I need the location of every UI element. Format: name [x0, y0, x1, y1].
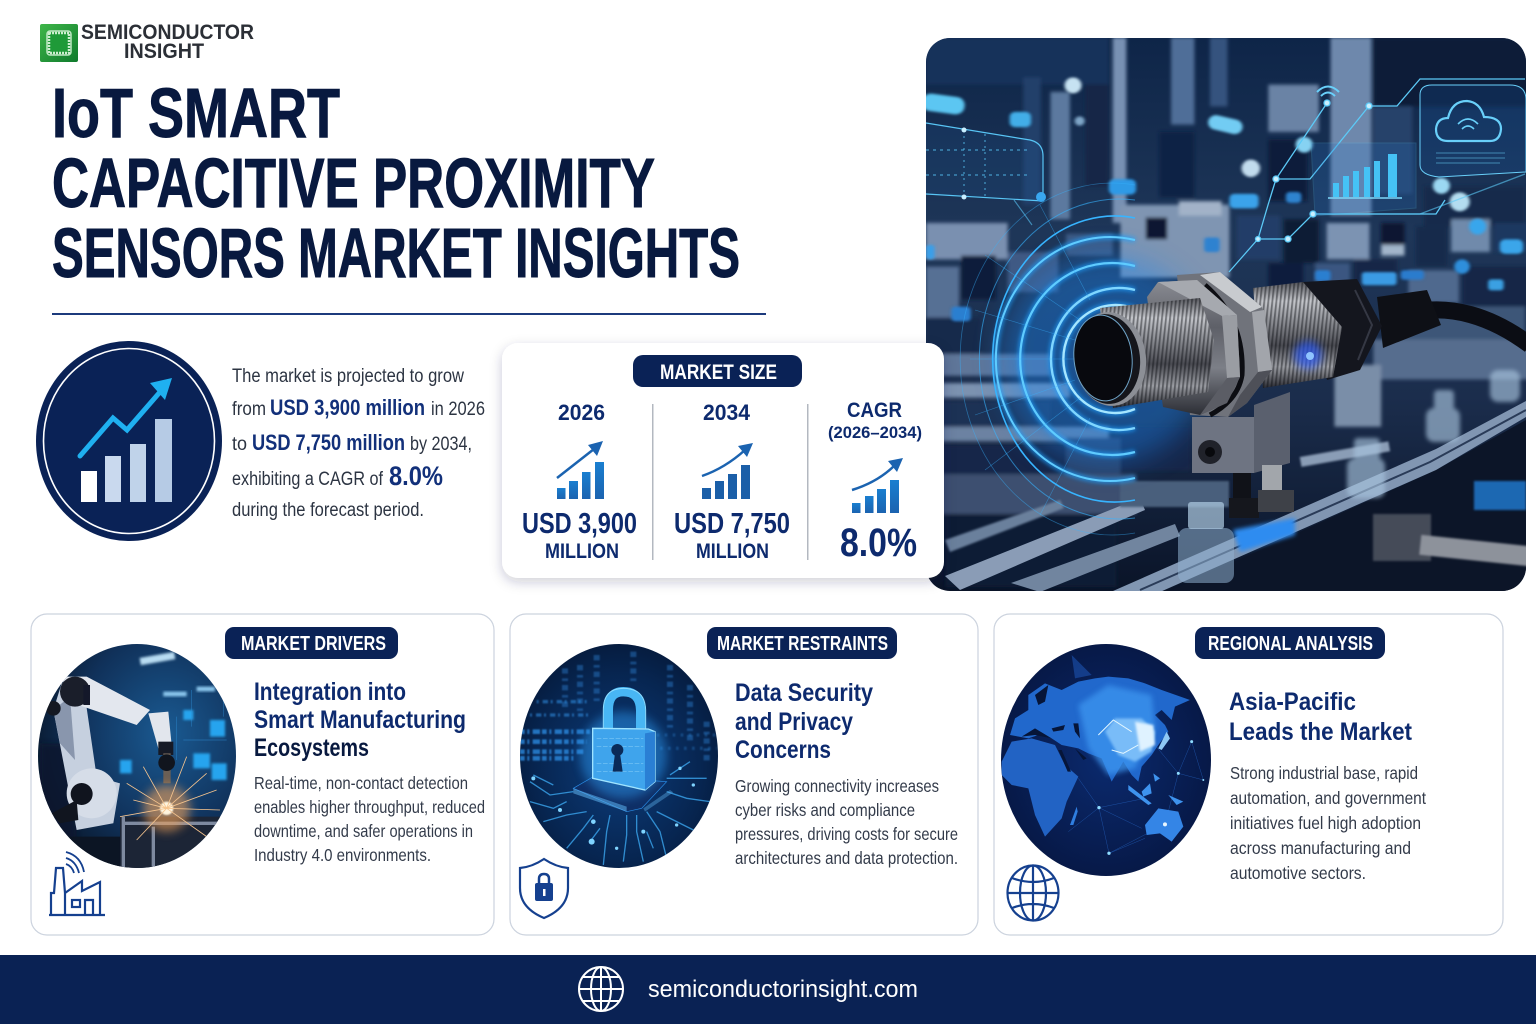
- icon: connected factory: [49, 852, 105, 915]
- restraint heading: and Privacy: [735, 708, 853, 736]
- conveyor and rails: [945, 401, 1531, 600]
- market summary paragraph: 8.0%: [389, 461, 443, 491]
- market summary paragraph: [232, 366, 485, 521]
- regional heading: [1229, 688, 1413, 746]
- driver description: [254, 773, 485, 865]
- regional description: Strong industrial base, rapid: [1230, 763, 1418, 783]
- hero image: capacitive proximity sensor on a production line: [921, 37, 1531, 600]
- regional description: initiatives fuel high adoption: [1230, 813, 1421, 833]
- title: CAPACITIVE PROXIMITY: [52, 144, 655, 222]
- logo chip icon: [40, 24, 78, 62]
- icon: globe: [1008, 866, 1058, 920]
- title: IoT SMART: [52, 74, 340, 152]
- heading: regional analysis: REGIONAL ANALYSIS: [1208, 633, 1373, 655]
- logo wordmark: SEMICONDUCTOR: [81, 21, 254, 44]
- driver heading: Ecosystems: [254, 734, 369, 762]
- heading: market drivers: [225, 627, 398, 659]
- bottles: [1178, 370, 1520, 583]
- restraint description: cyber risks and compliance: [735, 800, 915, 820]
- title: SENSORS MARKET INSIGHTS: [52, 214, 740, 292]
- restraint heading: [735, 679, 873, 764]
- front hex nut: [1147, 280, 1240, 415]
- image: digital padlock on circuit: [520, 644, 718, 868]
- logo wordmark: [81, 21, 254, 63]
- front threaded barrel: [1100, 298, 1214, 408]
- column: 2034: 2034: [703, 400, 751, 425]
- column: 2026: USD 3,900: [522, 508, 637, 540]
- restraint description: architectures and data protection.: [735, 848, 958, 868]
- cable: [1415, 310, 1530, 345]
- status LED: [1294, 341, 1322, 369]
- restraint description: [735, 776, 958, 868]
- panel: regional analysis: [994, 614, 1503, 935]
- market summary paragraph: during the forecast period.: [232, 500, 424, 521]
- heading: market restraints: MARKET RESTRAINTS: [717, 633, 888, 655]
- rear threaded barrel: [1253, 282, 1342, 388]
- image: glowing world map globe: [1001, 644, 1211, 876]
- column: 2034: [674, 400, 790, 563]
- regional description: across manufacturing and: [1230, 838, 1411, 858]
- regional heading: Asia-Pacific: [1229, 688, 1356, 716]
- icon: growth chart badge: [36, 341, 222, 541]
- column: 2034: USD 7,750: [674, 508, 790, 540]
- column: 2026: [522, 400, 637, 563]
- driver heading: [254, 678, 466, 762]
- market summary paragraph: from: [232, 399, 266, 420]
- heading: regional analysis: [1195, 627, 1385, 659]
- driver description: downtime, and safer operations in: [254, 821, 473, 841]
- market summary paragraph: in 2026: [431, 399, 485, 420]
- logo wordmark: INSIGHT: [124, 40, 204, 63]
- arm lower: [53, 683, 120, 830]
- restraint heading: Data Security: [735, 679, 873, 707]
- driver description: enables higher throughput, reduced: [254, 797, 485, 817]
- market summary paragraph: by 2034,: [410, 434, 472, 455]
- mounting bracket: [1192, 417, 1254, 473]
- icon: security shield: [520, 859, 568, 918]
- market summary paragraph: USD 7,750 million: [252, 430, 405, 455]
- icon: footer globe: [579, 967, 623, 1011]
- heading: market size: [633, 355, 802, 387]
- regional description: [1230, 763, 1426, 883]
- footer bar: [0, 955, 1536, 1024]
- panel: market restraints: [510, 614, 978, 935]
- heading: market size: MARKET SIZE: [660, 361, 777, 384]
- data overlay: network lines: [1229, 79, 1525, 272]
- regional description: automotive sectors.: [1230, 863, 1366, 883]
- column: CAGR: 8.0%: [840, 521, 917, 565]
- driver heading: Smart Manufacturing: [254, 706, 466, 734]
- market summary paragraph: The market is projected to grow: [232, 366, 464, 387]
- data overlay: left panel: [926, 123, 1046, 225]
- title: [52, 74, 740, 292]
- restraint heading: Concerns: [735, 736, 831, 764]
- market summary paragraph: USD 3,900 million: [270, 395, 425, 420]
- regional description: automation, and government: [1230, 788, 1426, 808]
- sensor body: [1069, 272, 1530, 518]
- data overlay: cloud panel: [1420, 85, 1526, 177]
- column: 2026: MILLION: [545, 540, 619, 563]
- column: CAGR: CAGR: [847, 399, 902, 422]
- heading: market drivers: MARKET DRIVERS: [241, 633, 386, 655]
- regional heading: Leads the Market: [1229, 718, 1413, 746]
- market summary paragraph: to: [232, 434, 247, 455]
- rear hex nut: [1177, 272, 1272, 417]
- column: CAGR: (2026–2034): [828, 423, 922, 442]
- panel: market size: [502, 343, 944, 578]
- column: CAGR: [828, 399, 922, 565]
- image: robot arm welding: [38, 644, 236, 873]
- data overlay: wifi symbol: [1317, 86, 1339, 96]
- panel: market drivers: [31, 614, 494, 935]
- column: 2034: MILLION: [696, 540, 769, 563]
- driver description: Industry 4.0 environments.: [254, 845, 431, 865]
- website address: semiconductorinsight.com: [648, 976, 918, 1003]
- market summary paragraph: exhibiting a CAGR of: [232, 469, 384, 490]
- driver description: Real-time, non-contact detection: [254, 773, 468, 793]
- restraint description: pressures, driving costs for secure: [735, 824, 958, 844]
- restraint description: Growing connectivity increases: [735, 776, 939, 796]
- sparks: [143, 785, 190, 832]
- driver heading: Integration into: [254, 678, 406, 706]
- heading: market restraints: [707, 627, 897, 659]
- sensor face: [1076, 312, 1146, 406]
- bokeh lights: [921, 77, 1523, 321]
- company logo: [40, 21, 254, 63]
- column: 2026: 2026: [558, 400, 605, 425]
- sensing field arcs: [960, 183, 1210, 535]
- data overlay: bar chart panel: [1311, 143, 1416, 216]
- blurred factory background: [926, 37, 1529, 587]
- arm upper: [63, 677, 150, 725]
